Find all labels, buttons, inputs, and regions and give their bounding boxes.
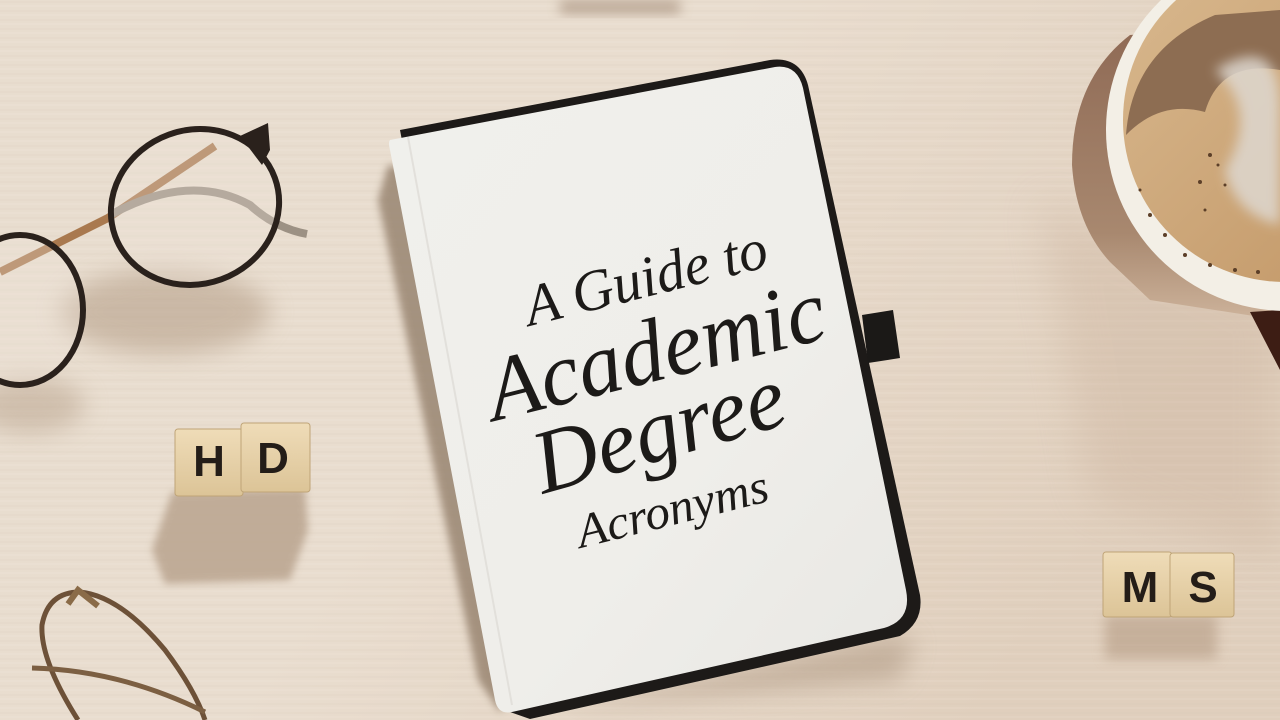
line: Degree: Degree <box>519 347 797 514</box>
letter H: H <box>193 437 225 486</box>
letter M: M <box>1122 563 1158 612</box>
back cover <box>400 60 921 719</box>
elastic tab <box>862 310 900 363</box>
block shadow right <box>1105 615 1217 659</box>
notebook <box>389 60 921 719</box>
line: Academic: Academic <box>471 261 836 442</box>
letter D: D <box>257 434 289 483</box>
glasses bottom left <box>32 590 205 720</box>
block shadow <box>152 488 308 584</box>
cover title <box>471 216 836 559</box>
white page <box>389 67 907 712</box>
coffee cup <box>1072 0 1280 370</box>
notebook shadow <box>378 165 515 712</box>
line: Acronyms: Acronyms <box>568 460 774 559</box>
wooden blocks: MS <box>1103 552 1234 617</box>
glasses top left <box>0 106 307 433</box>
line: A Guide to: A Guide to <box>514 216 774 340</box>
wooden blocks: HD <box>175 423 310 496</box>
letter S: S <box>1188 563 1218 612</box>
